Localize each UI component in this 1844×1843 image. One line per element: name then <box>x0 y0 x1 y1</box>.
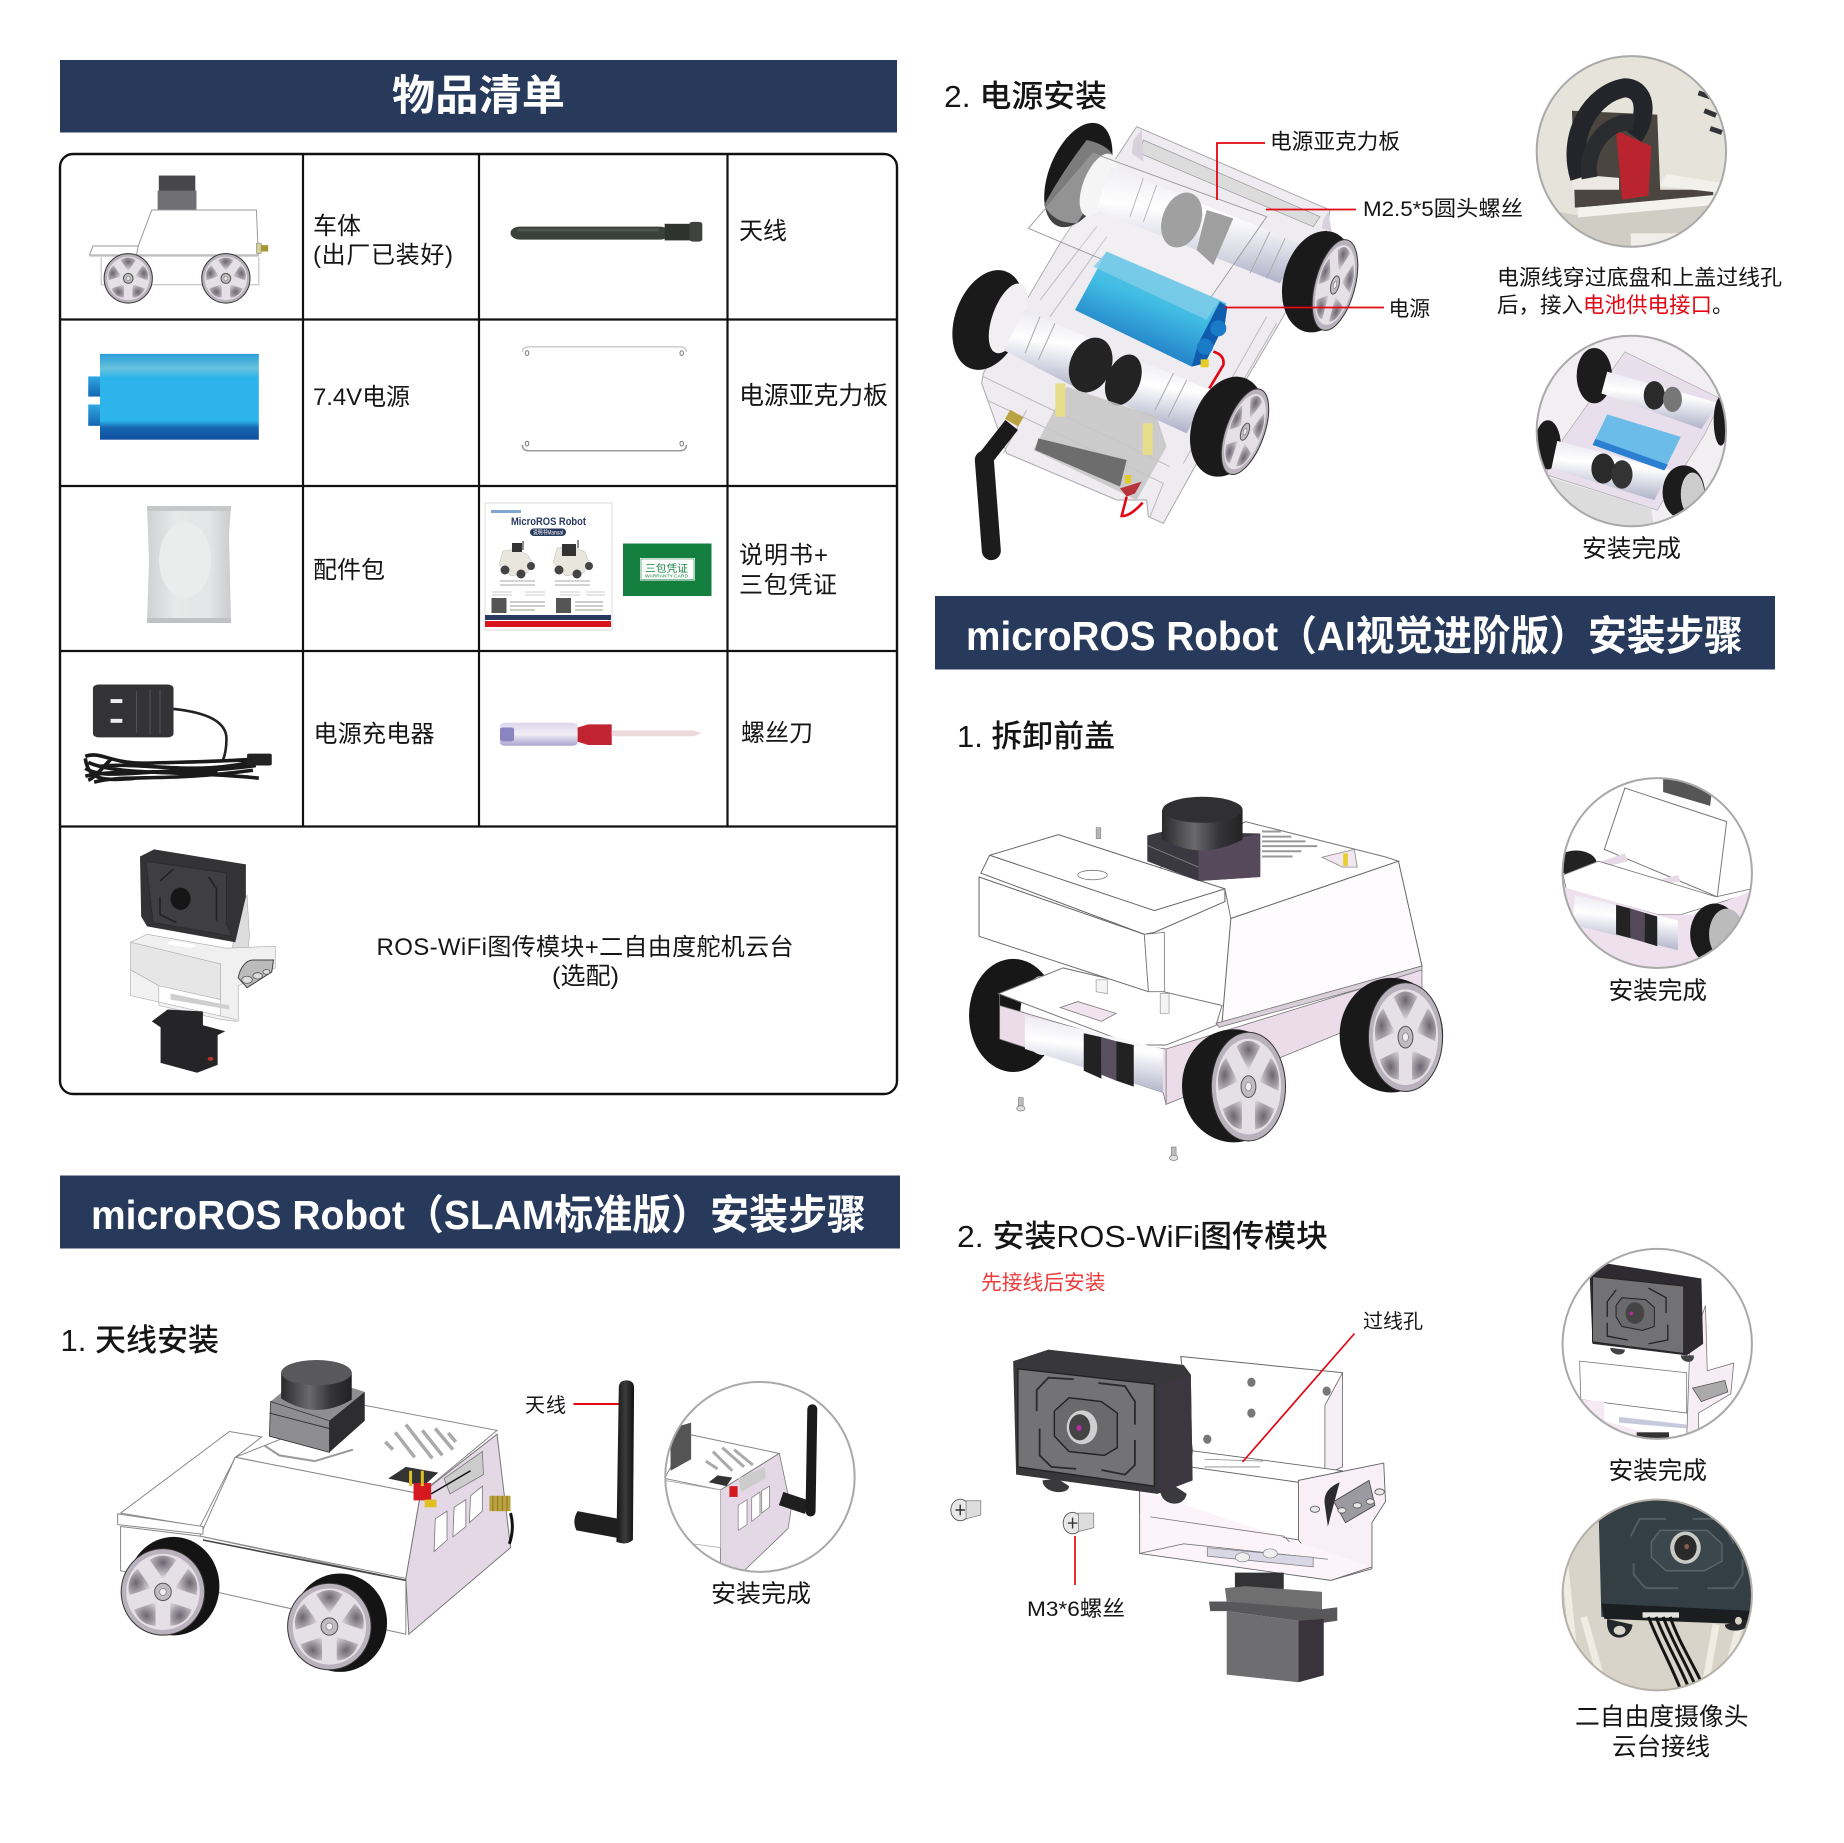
instruction text: power cable: 电源线穿过底盘和上盖过线孔 <box>1497 266 1782 290</box>
detail circle: power connector photo <box>1528 56 1728 253</box>
table text labels: 天线 <box>739 218 787 245</box>
detail circle: camera installed <box>1563 1249 1752 1440</box>
panel: parts list table <box>60 154 897 1094</box>
callout: 电源亚克力板: 电源亚克力板 <box>1270 130 1400 154</box>
label: 天线 with leader: 天线 <box>525 1394 566 1417</box>
table text labels: 电源亚克力板 <box>739 382 888 410</box>
icon: manual booklet: 说明书Manual <box>533 528 563 536</box>
detail circle: antenna installed <box>665 1382 855 1572</box>
table text labels: 说明书+ <box>739 542 828 569</box>
icon: accessories bag <box>147 506 231 623</box>
table text labels: ROS-WiFi图传模块+二自由度舵机云台 <box>376 934 794 961</box>
table text labels: 三包凭证 <box>739 572 837 599</box>
icon: warranty card <box>623 544 712 596</box>
icon: warranty card: 三包凭证 <box>645 562 688 575</box>
title bar: SLAM standard edition: microROS Robot（SLAM标准版）安装步骤 <box>91 1192 866 1238</box>
table text labels: 配件包 <box>313 557 385 584</box>
title bar: AI vision edition: microROS Robot（AI视觉进阶版）安装步骤 <box>966 613 1743 659</box>
illustration: battery installation in chassis <box>939 113 1366 551</box>
illustration: camera module and pan-tilt exploded <box>1013 1350 1386 1682</box>
icon: large antenna <box>574 1380 634 1543</box>
icon: robot car side view <box>89 176 268 303</box>
caption: 安装完成: 安装完成 <box>1582 535 1681 563</box>
caption: camera gimbal wiring <box>1575 1703 1748 1761</box>
table text labels <box>313 213 888 990</box>
title bar: 物品清单: 物品清单 <box>392 72 565 119</box>
heading: 2. 安装ROS-WiFi图传模块: 2. 安装ROS-WiFi图传模块 <box>957 1219 1328 1254</box>
instruction text: power cable: 后，接入电池供电接口。 <box>1497 294 1734 318</box>
callout: 电源亚克力板 <box>1217 130 1400 200</box>
table text labels: (选配) <box>552 963 619 990</box>
icon: antenna <box>511 222 702 242</box>
leader: 过线孔 <box>1242 1310 1423 1462</box>
icon: power charger <box>85 684 272 782</box>
icon: ROS-WiFi module with pan-tilt <box>131 849 275 1073</box>
icon: manual booklet <box>485 503 612 630</box>
leader: M3*6螺丝: M3*6螺丝 <box>1027 1597 1125 1621</box>
title bar: SLAM standard edition <box>60 1176 900 1248</box>
heading: 1. 拆卸前盖: 1. 拆卸前盖 <box>957 719 1115 754</box>
callout: 电源: 电源 <box>1388 298 1430 321</box>
icon: acrylic plate <box>522 347 686 451</box>
leader: 过线孔: 过线孔 <box>1363 1310 1423 1333</box>
callout: M2.5*5圆头螺丝: M2.5*5圆头螺丝 <box>1363 197 1523 221</box>
caption: camera gimbal wiring: 二自由度摄像头 <box>1575 1703 1748 1731</box>
title bar: 物品清单 <box>60 60 897 132</box>
icon: screwdriver <box>500 723 702 746</box>
icon: manual booklet: MicroROS Robot <box>511 516 586 528</box>
title bar: AI vision edition <box>935 596 1775 670</box>
icon: removed screw <box>1017 1098 1178 1161</box>
caption: 安装完成: 安装完成 <box>711 1580 811 1608</box>
caption: camera gimbal wiring: 云台接线 <box>1612 1733 1710 1761</box>
icon: screws <box>951 1499 1094 1534</box>
table text labels: 车体 <box>313 213 361 240</box>
table text labels: 7.4V电源 <box>313 384 410 411</box>
label: 天线 with leader <box>525 1394 620 1417</box>
illustration: SLAM robot <box>118 1360 512 1672</box>
table text labels: (出厂已装好) <box>313 242 453 269</box>
caption: 安装完成: 安装完成 <box>1608 1457 1707 1485</box>
detail circle: battery installed <box>1535 336 1728 532</box>
leader: M3*6螺丝 <box>1027 1536 1125 1621</box>
instruction text: power cable <box>1497 266 1782 318</box>
heading: 2. 电源安装: 2. 电源安装 <box>944 79 1107 114</box>
table text labels: 螺丝刀 <box>741 720 813 747</box>
acrylic cover plate <box>1028 153 1267 303</box>
icon: 7.4V battery <box>88 354 259 440</box>
detail circle: front cover removed <box>1555 778 1752 968</box>
table text labels: 电源充电器 <box>314 721 434 748</box>
detail circle: camera wiring photo <box>1563 1494 1757 1690</box>
illustration: robot with front cover removed <box>969 797 1443 1161</box>
icon: warranty card: WARRANTY CARD <box>645 574 689 578</box>
caption: 安装完成: 安装完成 <box>1608 977 1707 1005</box>
heading: 1. 天线安装: 1. 天线安装 <box>60 1323 219 1358</box>
note: 先接线后安装: 先接线后安装 <box>981 1272 1106 1294</box>
